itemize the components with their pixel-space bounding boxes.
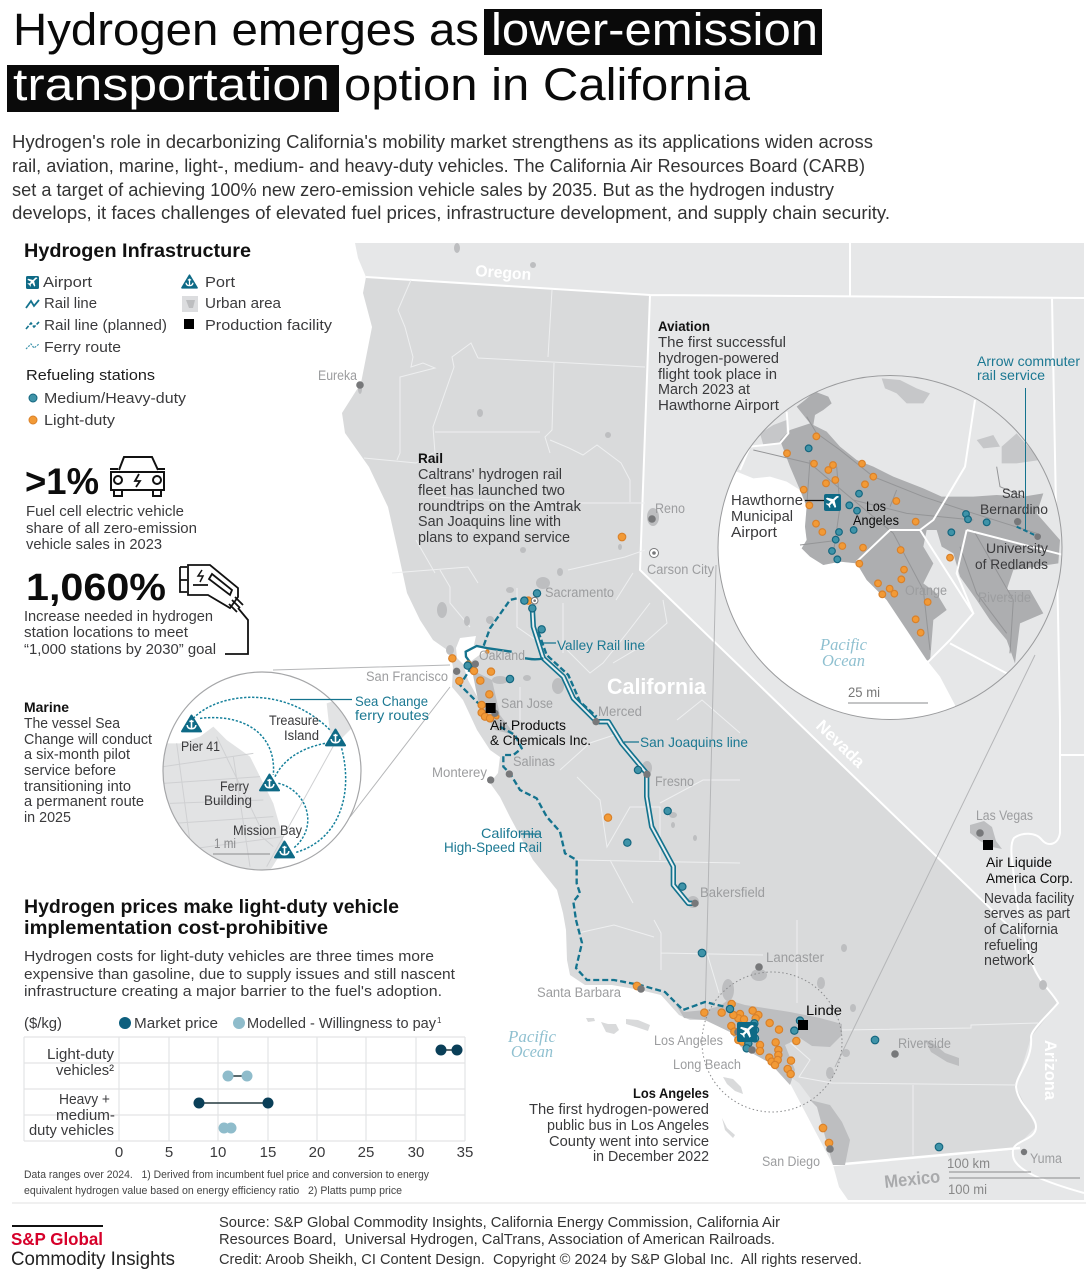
stat: station increase: 1,060% bbox=[26, 567, 166, 609]
city labels: San Diego bbox=[762, 1154, 820, 1169]
street grid bbox=[163, 737, 337, 867]
Arrow commuter rail callout: rail service bbox=[977, 367, 1045, 383]
annotation: Rail: Caltrans' hydrogen rail bbox=[418, 467, 562, 483]
rail labels bbox=[444, 637, 748, 855]
annotation: Aviation: The first successful bbox=[658, 335, 786, 351]
urban area bbox=[780, 392, 1060, 663]
neighbouring states land bbox=[355, 243, 1084, 1200]
city labels: Sacramento bbox=[545, 585, 614, 600]
urban areas bbox=[358, 243, 1047, 1165]
annotation: Rail: San Joaquins line with bbox=[418, 514, 561, 530]
annotation: Air Liquide: serves as part bbox=[984, 906, 1070, 922]
port labels: Building bbox=[204, 793, 252, 808]
ocean label bbox=[507, 1027, 556, 1061]
port labels: Treasure bbox=[269, 713, 319, 728]
inset ocean label bbox=[819, 635, 867, 670]
county lines bbox=[364, 280, 1038, 1155]
state borders bbox=[366, 243, 1084, 1193]
refueling stations heading: Refueling stations bbox=[26, 367, 155, 384]
icon: rail line bbox=[26, 300, 39, 308]
annotation: Los Angeles: in December 2022 bbox=[593, 1149, 709, 1165]
inset labels bbox=[731, 486, 1048, 572]
rail leader lines bbox=[521, 643, 639, 834]
inset map: Los Angeles: Orange bbox=[905, 583, 947, 598]
county lines bbox=[740, 400, 1063, 673]
annotation: Los Angeles: The first hydrogen-powered bbox=[529, 1102, 709, 1118]
city labels bbox=[318, 368, 1062, 1169]
inset map: San Francisco ferry routes bbox=[160, 672, 429, 873]
legend: Hydrogen Infrastructure: Rail line bbox=[44, 295, 97, 312]
state labels: Oregon bbox=[475, 263, 532, 284]
logo: S&P Global Commodity Insights: Commodity Insights bbox=[11, 1249, 175, 1270]
production facility: Linde bbox=[798, 1020, 808, 1030]
annotation: Marine: service before bbox=[24, 763, 116, 779]
legend: Hydrogen Infrastructure: Ferry route bbox=[44, 339, 121, 356]
icon: airport bbox=[26, 276, 39, 289]
inset labels: Municipal bbox=[731, 509, 793, 525]
city labels: Riverside bbox=[898, 1036, 951, 1051]
city dots near Los Angeles bbox=[734, 1028, 756, 1054]
icon: ferry route bbox=[26, 344, 39, 349]
production facility: Air Products bbox=[486, 703, 496, 713]
stations north and central bbox=[449, 590, 699, 907]
x axis labels: 10 bbox=[210, 1144, 226, 1161]
source and credit: Credit: Aroob Sheikh, CI Content Design. Copyright © 2024 by S&P Global Inc. All rights reserved. bbox=[219, 1251, 862, 1268]
chart legend: 1 bbox=[437, 1016, 442, 1025]
legend: Hydrogen Infrastructure: Production facility bbox=[205, 317, 333, 334]
chart unit: ($/kg) bbox=[24, 1015, 62, 1032]
state labels: California bbox=[607, 674, 707, 699]
annotation: Rail bbox=[418, 450, 582, 546]
medium and heavy-duty stations bbox=[464, 590, 686, 890]
x axis labels: 5 bbox=[165, 1144, 173, 1161]
light-duty market price bbox=[436, 1044, 462, 1056]
x axis labels: 20 bbox=[309, 1144, 325, 1161]
category labels: Light-duty bbox=[47, 1046, 115, 1063]
rail labels: San Joaquins line bbox=[640, 734, 748, 750]
port labels: Mission Bay bbox=[233, 823, 302, 838]
ocean bbox=[707, 472, 955, 727]
channel islands bbox=[586, 1018, 743, 1138]
ferry routes bbox=[193, 697, 346, 853]
light-duty stations bbox=[449, 597, 612, 821]
annotation: Los Angeles: County went into service bbox=[549, 1134, 709, 1150]
intro text: develops, it faces challenges of elevated fuel prices, infrastructure development, and supply chain security. bbox=[12, 203, 890, 223]
inset scale: 25 mi bbox=[848, 685, 880, 700]
icon: port bbox=[182, 275, 197, 288]
source and credit: Source: S&P Global Commodity Insights, California Energy Commission, California Air bbox=[219, 1214, 780, 1231]
chart description: Hydrogen costs for light-duty vehicles are three times more bbox=[24, 948, 434, 965]
airport Hawthorne on map bbox=[737, 1022, 757, 1042]
title: Hydrogen emerges as bbox=[13, 4, 479, 55]
logo: S&P Global Commodity Insights: S&P Global bbox=[11, 1229, 103, 1249]
annotation: Marine: transitioning into bbox=[24, 779, 131, 795]
airport marker: Hawthorne Municipal Airport bbox=[805, 494, 841, 511]
ports bbox=[182, 716, 345, 857]
port labels bbox=[181, 713, 319, 838]
inset labels: of Redlands bbox=[975, 557, 1048, 572]
state labels: Arizona bbox=[1041, 1040, 1060, 1101]
legend: Hydrogen Infrastructure bbox=[24, 241, 333, 429]
dot range chart bbox=[24, 1015, 473, 1161]
source and credit: Resources Board, Universal Hydrogen, CalTrans, Association of American Railroads. bbox=[219, 1231, 775, 1248]
inset labels: Bernardino bbox=[980, 502, 1048, 517]
light-duty stations Los Angeles bbox=[701, 1000, 800, 1078]
map scale bbox=[947, 1156, 1080, 1197]
legend: Hydrogen Infrastructure: Light-duty bbox=[44, 412, 116, 429]
chart legend bbox=[119, 1015, 442, 1032]
x axis labels: 15 bbox=[260, 1144, 276, 1161]
ocean label: Ocean bbox=[511, 1042, 553, 1061]
chart footnote: equivalent hydrogen value based on energy efficiency ratio 2) Platts pump price bbox=[24, 1185, 402, 1197]
category labels: Heavy + bbox=[59, 1091, 110, 1108]
heavy and medium-duty market price bbox=[194, 1098, 274, 1108]
x axis labels: 0 bbox=[115, 1144, 123, 1161]
Sea Change ferry routes callout: Sea Change bbox=[355, 693, 428, 709]
city labels: Los Angeles bbox=[654, 1033, 723, 1048]
chart legend: Modelled - Willingness to pay bbox=[247, 1015, 436, 1032]
stat: fuel cell share: share of all zero-emission bbox=[26, 521, 197, 537]
annotation: Marine bbox=[24, 699, 152, 826]
annotation: Air Liquide bbox=[984, 855, 1075, 969]
annotation: Marine: Marine bbox=[24, 699, 69, 715]
inset map: Los Angeles bbox=[707, 353, 1080, 727]
surrounding built-up areas bbox=[760, 378, 1040, 463]
annotation: Los Angeles bbox=[529, 1085, 709, 1165]
Valley Rail line bbox=[538, 632, 597, 717]
chart description bbox=[24, 948, 456, 1000]
chart heading: Hydrogen prices make light-duty vehicle bbox=[24, 897, 399, 918]
stat: fuel cell share: Fuel cell electric vehicle bbox=[26, 504, 184, 520]
inset labels: Airport bbox=[731, 525, 777, 541]
intro text: Hydrogen's role in decarbonizing California's mobility market strengthens as its applications widen across bbox=[12, 132, 873, 152]
city labels: Monterey bbox=[432, 765, 487, 780]
category labels: medium- bbox=[56, 1107, 115, 1124]
city labels: Bakersfield bbox=[700, 885, 765, 900]
Arrow commuter rail callout bbox=[977, 353, 1080, 530]
title: lower-emission bbox=[491, 4, 818, 55]
other stations bbox=[618, 533, 943, 1151]
map scale: 100 km bbox=[947, 1156, 990, 1171]
legend: Hydrogen Infrastructure: Urban area bbox=[205, 295, 282, 312]
medium and heavy-duty stations Los Angeles bbox=[726, 1005, 804, 1052]
light-duty modelled bbox=[222, 1070, 252, 1082]
city labels: San Francisco bbox=[366, 669, 448, 684]
Sea Change ferry routes callout bbox=[290, 693, 429, 723]
city labels: Reno bbox=[655, 501, 685, 516]
city labels: Las Vegas bbox=[976, 808, 1033, 823]
California High-Speed Rail bbox=[460, 598, 580, 920]
annotation: Rail: plans to expand service bbox=[418, 530, 570, 546]
city labels: Eureka bbox=[318, 368, 357, 383]
icon: medium and heavy-duty station bbox=[29, 394, 37, 402]
title: transportation bbox=[13, 59, 330, 110]
inset labels: University bbox=[986, 541, 1048, 556]
Sea Change ferry routes callout: ferry routes bbox=[355, 707, 429, 723]
rail lines bbox=[460, 598, 695, 920]
Carson City capital marker bbox=[650, 548, 658, 558]
San Joaquins line bbox=[532, 608, 695, 903]
intro text: rail, aviation, marine, light-, medium- and heavy-duty vehicles. The California Air Resources Board (CARB) bbox=[12, 156, 865, 176]
state labels bbox=[475, 263, 1060, 1192]
legend: Hydrogen Infrastructure: Medium/Heavy-duty bbox=[44, 390, 187, 407]
production facility: Air Liquide bbox=[983, 840, 993, 850]
annotation: Marine: Change will conduct bbox=[24, 732, 152, 748]
stat: station increase bbox=[24, 565, 248, 658]
annotation: Marine: a permanent route bbox=[24, 794, 144, 810]
annotation: Los Angeles: public bus in Los Angeles bbox=[547, 1118, 709, 1134]
annotation: Aviation bbox=[658, 318, 786, 414]
state labels: Mexico bbox=[883, 1166, 941, 1192]
port labels: Ferry bbox=[220, 779, 249, 794]
rail labels: Valley Rail line bbox=[557, 637, 645, 653]
inset ocean label: Pacific bbox=[819, 635, 867, 654]
city labels: Carson City bbox=[647, 562, 714, 577]
Arrow commuter rail callout: Arrow commuter bbox=[977, 353, 1080, 369]
city labels: San Jose bbox=[501, 696, 553, 711]
annotation: Los Angeles: Los Angeles bbox=[633, 1085, 709, 1101]
x axis labels: 35 bbox=[457, 1144, 473, 1161]
stat: station increase: “1,000 stations by 2030” goal bbox=[24, 642, 216, 658]
grid bbox=[24, 1037, 465, 1141]
facility label: Air Products bbox=[490, 718, 591, 748]
title bbox=[7, 4, 822, 112]
category labels: duty vehicles bbox=[29, 1122, 114, 1139]
annotation: Air Liquide: network bbox=[984, 953, 1035, 969]
annotation: Aviation: Aviation bbox=[658, 318, 710, 334]
annotation: Marine: a six-month pilot bbox=[24, 747, 130, 763]
Los Angeles dotted circle bbox=[702, 972, 842, 1112]
icon: rail line planned bbox=[26, 322, 39, 329]
x axis labels: 30 bbox=[408, 1144, 424, 1161]
inset scale: 1 mi bbox=[214, 836, 236, 851]
annotation: Rail: fleet has launched two bbox=[418, 483, 565, 499]
legend heading: Hydrogen Infrastructure bbox=[24, 241, 251, 262]
inset labels: Hawthorne bbox=[731, 493, 803, 509]
icon: urban area bbox=[182, 296, 198, 312]
facility label: Linde: Linde bbox=[806, 1003, 842, 1018]
Sacramento capital marker bbox=[531, 597, 538, 604]
x axis labels: 25 bbox=[358, 1144, 374, 1161]
city labels: Merced bbox=[598, 704, 642, 719]
title: option in California bbox=[344, 59, 751, 110]
stat: station increase: station locations to meet bbox=[24, 625, 188, 641]
intro text bbox=[12, 132, 890, 223]
San Francisco Bay bbox=[456, 636, 488, 698]
annotation: Aviation: Hawthorne Airport bbox=[658, 398, 779, 414]
intro text: set a target of achieving 100% new zero-emission vehicle sales by 2035. But as the hydrogen industry bbox=[12, 180, 834, 200]
icon: light-duty station bbox=[29, 416, 37, 424]
California land bbox=[342, 277, 1058, 1165]
inset scale bbox=[213, 836, 270, 854]
land bbox=[160, 700, 353, 873]
city labels: Long Beach bbox=[673, 1057, 741, 1072]
annotation: Rail: Rail bbox=[418, 450, 443, 466]
chart legend: Market price bbox=[134, 1015, 218, 1032]
chart footnote: Data ranges over 2024. 1) Derived from incumbent fuel price and conversion to energy bbox=[24, 1169, 430, 1181]
annotation: Marine: The vessel Sea bbox=[24, 716, 121, 732]
rail labels: California bbox=[481, 825, 542, 841]
inset map: Los Angeles: Riverside bbox=[978, 590, 1031, 605]
chart description: infrastructure creating a major barrier to the fuel's adoption. bbox=[24, 983, 442, 1000]
city labels: Santa Barbara bbox=[537, 985, 621, 1000]
city labels: Oakland bbox=[479, 648, 525, 663]
category labels: vehicles² bbox=[56, 1062, 114, 1079]
inset leader lines bbox=[273, 565, 1035, 1067]
legend: Hydrogen Infrastructure: Airport bbox=[43, 274, 93, 291]
inset ocean label: Ocean bbox=[822, 651, 865, 670]
city labels: Yuma bbox=[1030, 1151, 1062, 1166]
legend: Hydrogen Infrastructure: Rail line (planned) bbox=[44, 317, 167, 334]
stat: fuel cell share: >1% bbox=[25, 461, 99, 502]
inset labels: San bbox=[1002, 486, 1025, 501]
port labels: Island bbox=[284, 728, 319, 743]
facility label: Air Products: Air Products bbox=[490, 718, 566, 733]
annotation: Aviation: March 2023 at bbox=[658, 382, 750, 398]
annotation: Aviation: flight took place in bbox=[658, 367, 777, 383]
ocean label: Pacific bbox=[507, 1027, 556, 1046]
city labels: Lancaster bbox=[766, 950, 824, 965]
inset scale bbox=[848, 685, 928, 703]
stations south bbox=[356, 381, 1027, 1155]
city dots bbox=[356, 381, 1027, 1155]
state labels: Nevada bbox=[812, 716, 869, 772]
annotation: Air Liquide: Air Liquide bbox=[986, 855, 1052, 870]
cities bbox=[453, 660, 699, 907]
city labels: Salinas bbox=[513, 754, 555, 769]
facility label: Air Products: & Chemicals Inc. bbox=[490, 733, 591, 748]
map scale: 100 mi bbox=[948, 1182, 987, 1197]
chart description: expensive than gasoline, due to supply issues and still nascent bbox=[24, 966, 456, 983]
logo: S&P Global Commodity Insights bbox=[11, 1226, 175, 1270]
chart heading bbox=[24, 897, 399, 939]
source and credit bbox=[219, 1214, 862, 1268]
inset labels: Los bbox=[866, 499, 886, 514]
city labels: Fresno bbox=[655, 774, 694, 789]
icon: car bbox=[110, 457, 165, 496]
annotation: Rail: roundtrips on the Amtrak bbox=[418, 499, 582, 515]
legend: Hydrogen Infrastructure: Port bbox=[205, 274, 236, 291]
inset labels: Angeles bbox=[853, 513, 899, 528]
annotation: Marine: in 2025 bbox=[24, 810, 71, 826]
roads bbox=[753, 417, 1037, 653]
heavy and medium-duty modelled bbox=[218, 1122, 236, 1134]
category labels bbox=[29, 1046, 115, 1139]
Oakland connection bbox=[466, 646, 543, 667]
icon: production facility bbox=[184, 319, 194, 329]
chart footnote bbox=[24, 1169, 430, 1197]
annotation: Air Liquide: Nevada facility bbox=[984, 891, 1075, 907]
annotation: Air Liquide: of California bbox=[984, 922, 1059, 938]
annotation: Air Liquide: America Corp. bbox=[986, 871, 1073, 886]
annotation: Aviation: hydrogen-powered bbox=[658, 351, 779, 367]
stat: fuel cell share: vehicle sales in 2023 bbox=[26, 537, 162, 553]
annotation: Air Liquide: refueling bbox=[984, 938, 1038, 954]
rail labels: High-Speed Rail bbox=[444, 839, 542, 855]
icon: hydrogen nozzle bbox=[180, 565, 248, 654]
stations bbox=[784, 433, 953, 636]
stat: station increase: Increase needed in hydrogen bbox=[24, 609, 213, 625]
map of California bbox=[273, 243, 1084, 1200]
stat: fuel cell share bbox=[25, 457, 197, 553]
port labels: Pier 41 bbox=[181, 739, 220, 754]
x axis labels bbox=[115, 1144, 473, 1161]
chart heading: implementation cost-prohibitive bbox=[24, 918, 328, 939]
